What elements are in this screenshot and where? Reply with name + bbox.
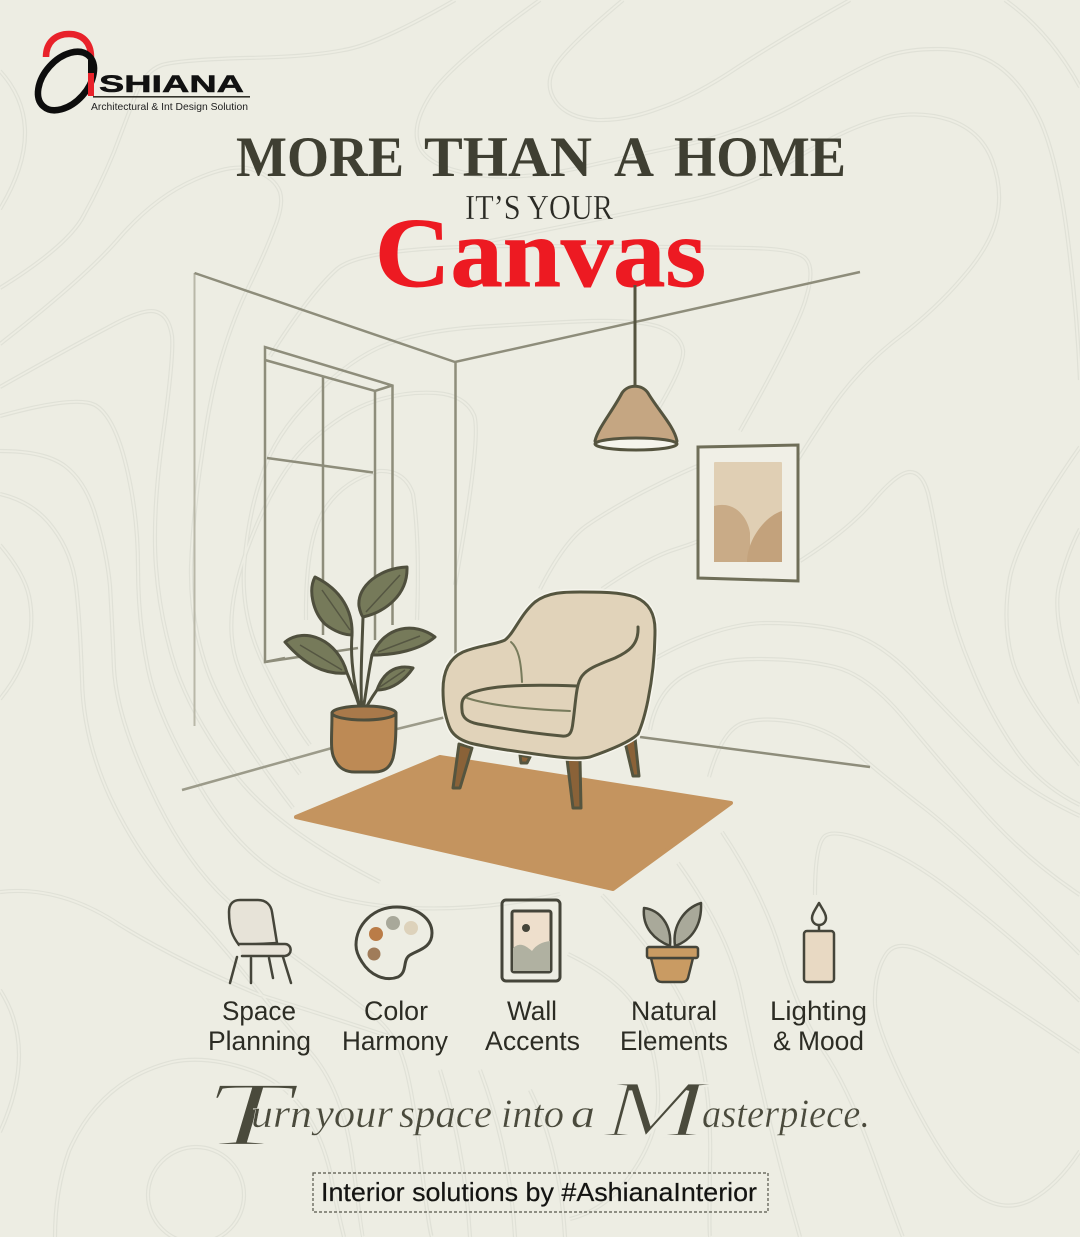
logo: Ashiana [27, 34, 250, 121]
window [265, 347, 392, 662]
tagline script: space [399, 1091, 492, 1136]
icon: wall frame [502, 900, 560, 981]
label: natural elements: Elements [620, 1026, 728, 1056]
icon: potted leaves [644, 903, 701, 982]
label: color harmony [342, 996, 448, 1056]
label: wall accents: Wall [507, 996, 557, 1026]
label: wall accents [485, 996, 580, 1056]
label: lighting and mood: & Mood [773, 1026, 864, 1056]
icon: palette [356, 907, 432, 979]
label: natural elements [620, 996, 728, 1056]
title: More than a home [236, 126, 846, 189]
rug [296, 757, 731, 889]
chair cushion seam [467, 698, 570, 711]
chair arm curve [462, 627, 638, 736]
feature: natural elements [620, 903, 728, 1056]
headline accent: Canvas: Canvas [375, 199, 706, 308]
tagline script [204, 1063, 870, 1165]
tagline script: into [501, 1091, 564, 1136]
leaf veins [300, 575, 420, 687]
leaves [285, 567, 435, 690]
title: More than a home: A [614, 126, 654, 189]
chair body [443, 592, 655, 758]
label: color harmony: Harmony [342, 1026, 448, 1056]
label: space planning [208, 996, 311, 1056]
tagline script: your [311, 1091, 393, 1136]
title: More than a home: THAN [424, 126, 592, 189]
chair legs [453, 738, 639, 808]
tagline script: T [204, 1063, 300, 1165]
title: More than a home: HOME [674, 126, 846, 189]
pot [332, 713, 396, 772]
icon: chair [229, 900, 291, 983]
logo icon: red arch and black ring [27, 34, 105, 121]
chair halo [443, 592, 655, 758]
label: natural elements: Natural [631, 996, 717, 1026]
icon: candle [804, 903, 834, 982]
tagline script: M [601, 1066, 713, 1154]
label: wall accents: Accents [485, 1026, 580, 1056]
label: space planning: Planning [208, 1026, 311, 1056]
tagline script: asterpiece. [702, 1091, 870, 1136]
tagline script: urn [251, 1091, 312, 1136]
title: More than a home: MORE [236, 126, 404, 189]
armchair [443, 592, 655, 808]
pendant lamp [595, 285, 677, 450]
chair back seam [511, 642, 522, 682]
potted plant [285, 567, 435, 772]
feature: wall accents [485, 900, 580, 1056]
feature: space planning [208, 900, 311, 1056]
label: color harmony: Color [364, 996, 428, 1026]
feature: lighting and mood [770, 903, 867, 1056]
subtitle: It's your: IT’S YOUR [465, 188, 614, 227]
room line drawing [182, 272, 870, 790]
label: lighting and mood: Lighting [770, 996, 867, 1026]
logo wordmark: SHIANA [99, 71, 244, 98]
label: lighting and mood [770, 996, 867, 1056]
logo tagline: Architectural & Int Design Solution [91, 101, 248, 113]
feature: color harmony [342, 907, 448, 1056]
tagline script: a [571, 1091, 595, 1136]
stems [347, 617, 377, 716]
hashtag callout box: Interior solutions by #AshianaInterior [321, 1177, 757, 1207]
label: space planning: Space [222, 996, 296, 1026]
framed wall art [698, 445, 798, 581]
